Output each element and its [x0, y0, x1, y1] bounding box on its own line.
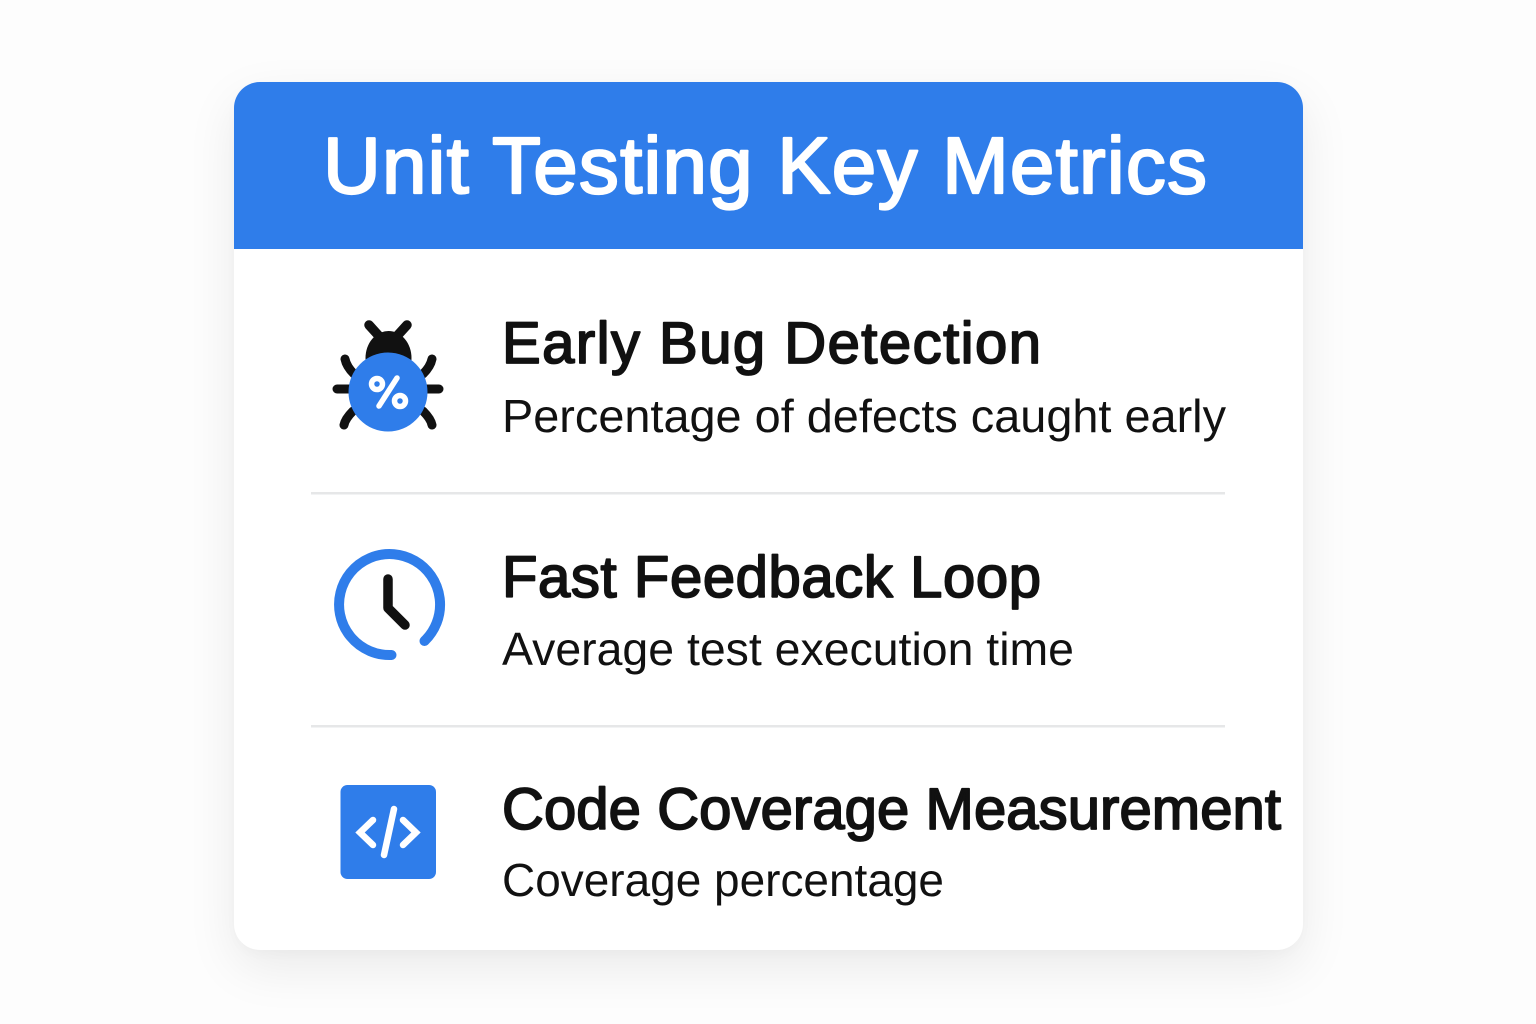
metric row: fast feedback loop	[339, 545, 1074, 675]
heading: Early Bug Detection: Early Bug Detection	[502, 311, 1041, 376]
header band	[234, 82, 1303, 249]
description: execution time: Average test execution time	[502, 623, 1074, 675]
description: coverage percentage: Coverage percentage	[502, 854, 944, 906]
heading: Fast Feedback Loop: Fast Feedback Loop	[502, 545, 1041, 610]
icon: code brackets	[340, 785, 436, 879]
icon: bug with percent	[337, 325, 439, 432]
icon: clock	[339, 554, 440, 655]
metric row: code coverage measurement	[340, 777, 1281, 906]
metric row: early bug detection	[337, 311, 1226, 442]
card background	[234, 82, 1303, 950]
title: Unit Testing Key Metrics	[323, 121, 1207, 210]
description: defects: Percentage of defects caught early	[502, 390, 1226, 442]
heading: Code Coverage Measurement: Code Coverage Measurement	[502, 777, 1281, 842]
